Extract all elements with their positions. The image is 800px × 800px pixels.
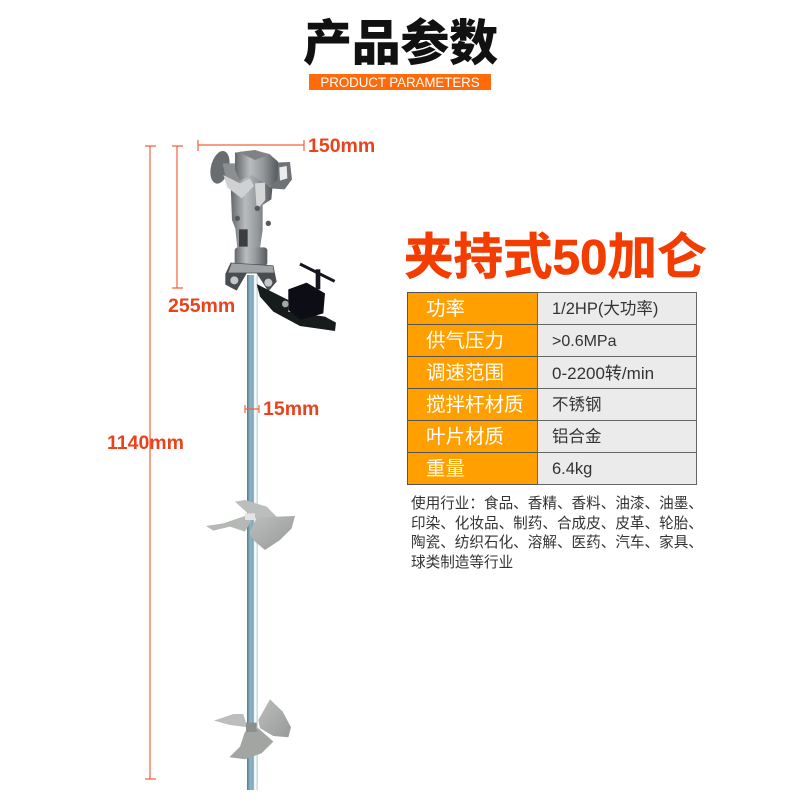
product heading: 夹持式50加仑 (404, 230, 707, 285)
applicable industries text: 陶瓷、纺织石化、溶解、医药、汽车、家具、 (411, 535, 703, 551)
collar (235, 247, 267, 266)
label: 150mm: 150mm (308, 135, 375, 157)
row: speed range: 0-2200转/min (552, 364, 654, 383)
row: power (407, 292, 697, 324)
row: shaft material (407, 389, 697, 420)
left exhaust cap (207, 149, 233, 186)
title: 产品参数 (303, 17, 498, 71)
row: shaft material: 不锈钢 (552, 396, 602, 414)
applicable industries text: 印染、化妆品、制药、合成皮、皮革、轮胎、 (411, 516, 703, 532)
applicable industries text: 使用行业：食品、香精、香料、油漆、油墨、 (411, 496, 703, 512)
right port (270, 162, 292, 189)
top housing (235, 150, 278, 187)
row: speed range: 调速范围 (426, 362, 504, 384)
row: speed range (407, 357, 697, 388)
row: weight: 6.4kg (552, 460, 592, 478)
lower body (231, 175, 272, 248)
row: shaft material: 搅拌杆材质 (426, 394, 524, 416)
product image: pneumatic mixer with dimensions (145, 140, 336, 790)
upper impeller (206, 500, 295, 550)
spec table (407, 292, 697, 485)
clamp bracket (257, 284, 336, 331)
label: 255mm: 255mm (168, 295, 235, 317)
row: weight: 重量 (426, 458, 465, 480)
subtitle banner: PRODUCT PARAMETERS (320, 75, 480, 90)
row: air pressure: >0.6MPa (552, 333, 616, 350)
label: 15mm: 15mm (263, 398, 319, 420)
lower impeller (214, 699, 291, 759)
flange (225, 263, 277, 291)
row: air pressure: 供气压力 (426, 330, 504, 352)
row: air pressure (407, 325, 697, 356)
row: blade material: 铝合金 (552, 428, 602, 446)
clamp screw handle (299, 263, 335, 283)
row: blade material (407, 421, 697, 452)
row: blade material: 叶片材质 (426, 426, 504, 448)
dimension lines (145, 140, 304, 779)
motor head (207, 149, 336, 331)
row: power: 功率 (426, 298, 465, 320)
row: power: 1/2HP(大功率) (552, 300, 658, 318)
label: 1140mm: 1140mm (107, 432, 184, 454)
applicable industries text (411, 495, 703, 571)
mixer shaft (247, 275, 258, 790)
row: weight (407, 453, 697, 485)
applicable industries text: 球类制造等行业 (411, 555, 513, 571)
